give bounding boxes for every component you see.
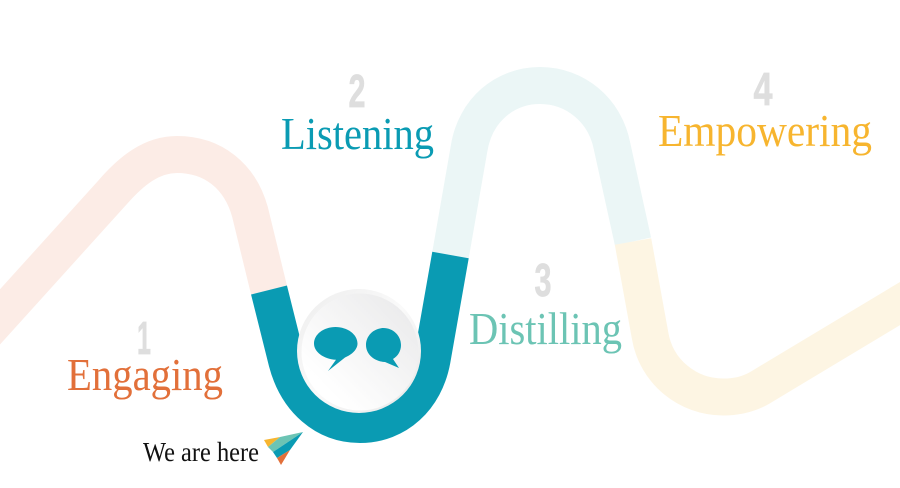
- icon: left speech bubble: [314, 327, 358, 371]
- step 3 number: 3: [534, 254, 552, 306]
- path segment: empowering (cream): [633, 242, 900, 397]
- icon: right speech bubble: [366, 328, 401, 368]
- path segment: distilling (light blue): [450, 86, 633, 255]
- path segment: engaging (pink): [0, 154, 269, 339]
- step 2 number: 2: [348, 65, 366, 117]
- step 4 label: Empowering: [658, 105, 872, 156]
- path segment: listening (teal): [269, 255, 450, 424]
- step 3 label: Distilling: [469, 303, 622, 354]
- step 2 label: Listening: [281, 108, 434, 159]
- icon: speech bubble disc: [297, 289, 421, 413]
- step 1 label: Engaging: [67, 349, 223, 400]
- we are here label: We are here: [143, 437, 259, 467]
- icon: we are here arrow marker: [264, 432, 303, 465]
- step 4 number: 4: [754, 63, 773, 115]
- step 1 number: 1: [137, 312, 151, 364]
